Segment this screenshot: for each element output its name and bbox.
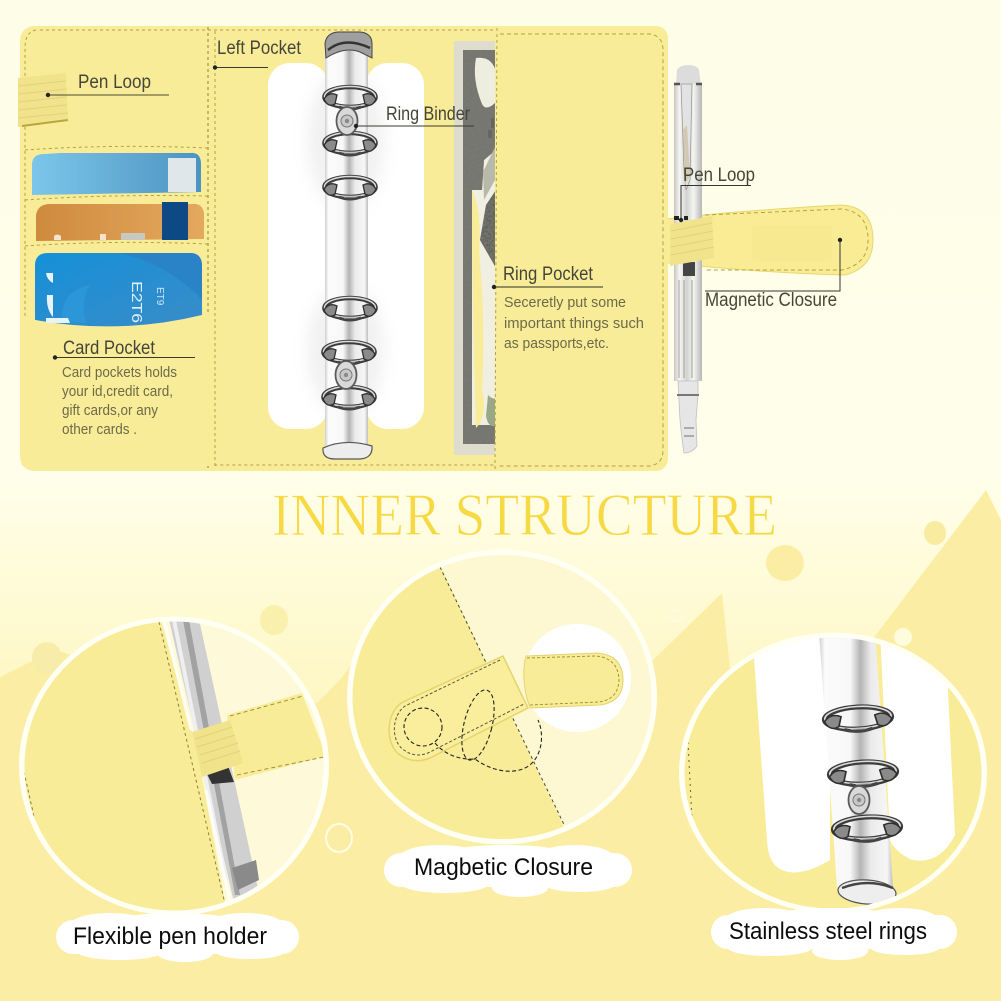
card pocket description: your id,credit card, — [62, 383, 173, 400]
white slots — [752, 630, 830, 872]
binder open view — [18, 26, 873, 471]
background mountains — [0, 490, 1001, 1001]
callout: ring pocket: Ring Pocket — [503, 264, 594, 285]
pen strap — [660, 205, 873, 275]
credit cards: E2T6 — [128, 281, 145, 323]
ring pocket description: as passports,etc. — [504, 335, 609, 352]
card pocket front — [22, 313, 212, 466]
ring pocket description: important things such — [504, 315, 644, 332]
white pocket slots — [268, 63, 424, 429]
money in ring pocket — [454, 41, 496, 455]
label cloud: stainless steel rings: Stainless steel rings — [729, 918, 927, 945]
callout: pen loop — [46, 72, 169, 97]
callout: pen loop: Pen Loop — [78, 72, 151, 93]
callout: magnetic closure: Magnetic Closure — [705, 290, 837, 311]
callout: ring binder: Ring Binder — [386, 104, 471, 125]
ring binder — [323, 32, 376, 459]
label cloud: magbetic closure: Magbetic Closure — [414, 854, 593, 881]
label cloud: flexible pen holder: Flexible pen holder — [73, 923, 267, 950]
card pocket description: gift cards,or any — [62, 402, 158, 419]
elastic pen loop right — [670, 216, 714, 266]
callout: left pocket: Left Pocket — [217, 38, 302, 59]
label cloud: magbetic closure — [384, 845, 632, 897]
callout: pen loop right: Pen Loop — [683, 165, 755, 186]
pen loop left — [18, 73, 68, 127]
card pocket description — [62, 364, 177, 438]
ring pocket description: Seceretly put some — [504, 294, 626, 311]
callout: left pocket — [213, 38, 302, 70]
stitching on cover — [25, 27, 495, 470]
title: INNER STRUCTURE — [272, 482, 777, 548]
card pocket description: other cards . — [62, 421, 137, 438]
label cloud: flexible pen holder — [56, 913, 299, 962]
pen close-up — [168, 615, 259, 907]
white highlight — [523, 624, 631, 732]
ring pocket description — [504, 294, 644, 352]
detail circle: stainless steel rings — [678, 630, 988, 913]
callout: pen loop right — [679, 165, 755, 222]
binder cover — [20, 26, 668, 471]
dashed magnet outlines — [404, 687, 542, 771]
leather panel — [352, 567, 564, 839]
leather panel — [24, 622, 225, 910]
callout: card pocket: Card Pocket — [63, 338, 156, 359]
detail circle: magnetic closure — [347, 550, 657, 844]
strap end — [524, 653, 623, 708]
bottom end cap — [323, 442, 372, 459]
detail circle: flexible pen holder — [19, 616, 329, 914]
callout: card pocket — [53, 338, 195, 438]
credit cards: ET9 — [154, 287, 165, 306]
elastic close-up — [192, 720, 243, 777]
right pocket flap — [495, 26, 668, 471]
metal rod — [819, 633, 893, 887]
top end cap — [325, 32, 372, 58]
card pocket description: Card pockets holds — [62, 364, 177, 381]
callout: ring pocket — [492, 264, 644, 352]
strap close-up — [227, 693, 326, 780]
metal rod — [325, 40, 368, 450]
closure tab — [389, 656, 528, 761]
callout: ring binder — [354, 104, 474, 128]
pen — [674, 65, 702, 453]
rings — [324, 86, 376, 109]
decorative dots — [32, 521, 946, 852]
leather backdrop — [678, 633, 988, 913]
credit cards — [32, 153, 204, 326]
label cloud: stainless steel rings — [711, 908, 957, 960]
rivets — [336, 107, 358, 135]
rings — [824, 705, 892, 733]
end cap — [837, 878, 897, 906]
callout: magnetic closure — [705, 238, 842, 311]
